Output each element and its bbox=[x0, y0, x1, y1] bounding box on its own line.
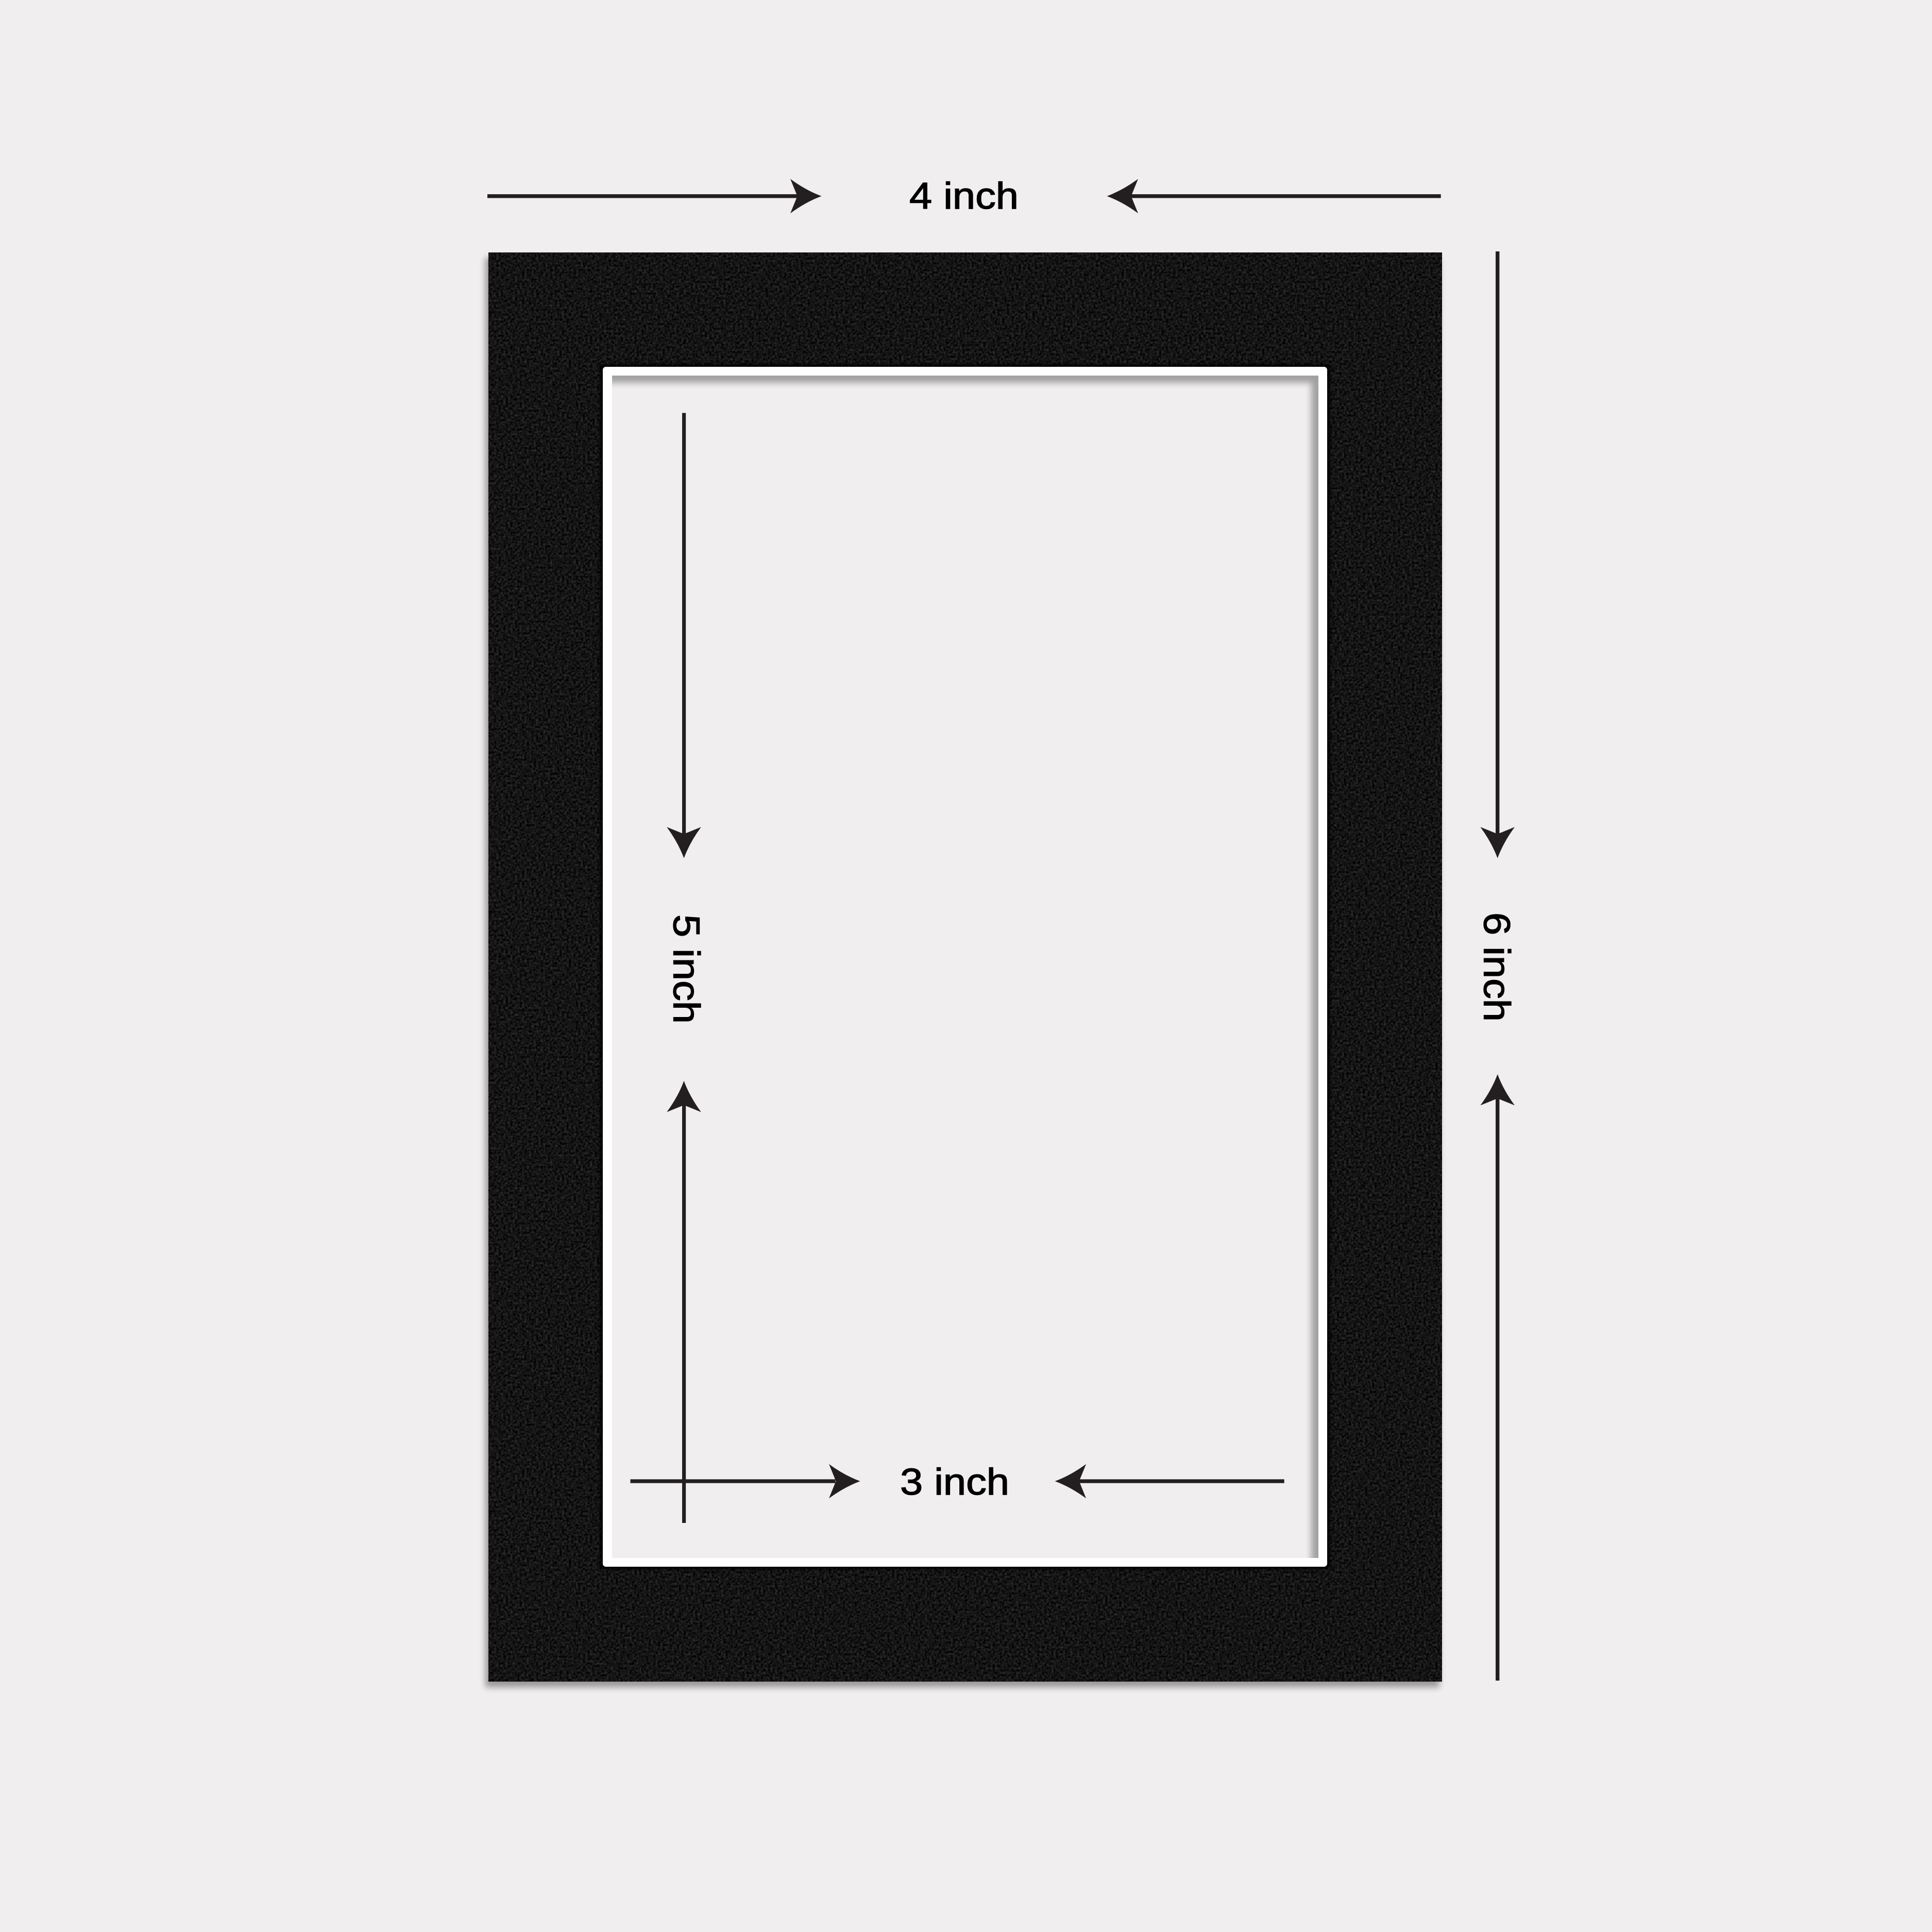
label: 4 inch: 4 inch bbox=[909, 176, 1019, 217]
arrow: left segment pointing right bbox=[487, 179, 822, 213]
window opening bbox=[612, 376, 1318, 1558]
arrow: bottom segment pointing up bbox=[1480, 1074, 1515, 1681]
arrow: right segment pointing left bbox=[1107, 179, 1441, 213]
dimension: outer height 6 inch bbox=[1476, 251, 1517, 1681]
dimension: outer width 4 inch bbox=[487, 176, 1441, 217]
dimension: window width 3 inch bbox=[631, 1462, 1284, 1503]
arrow: top segment pointing down bbox=[667, 413, 701, 858]
window inner shadow bbox=[612, 376, 1318, 1558]
dimension: window height 5 inch bbox=[666, 413, 707, 1523]
mat drop shadow bbox=[485, 258, 1439, 1687]
panel: black photo mat with window bbox=[485, 252, 1442, 1687]
arrow: right segment pointing left bbox=[1055, 1464, 1284, 1498]
label: 3 inch: 3 inch bbox=[900, 1462, 1009, 1503]
mat board bbox=[488, 252, 1442, 1682]
infographic: photo mat dimensions diagram bbox=[481, 179, 1515, 1691]
label: 5 inch: 5 inch bbox=[666, 914, 707, 1024]
arrow: left segment pointing right bbox=[631, 1464, 860, 1498]
arrow: top segment pointing down bbox=[1480, 251, 1515, 858]
label: 6 inch: 6 inch bbox=[1476, 912, 1517, 1022]
window bevel dark edge bbox=[600, 364, 1330, 1569]
white bevel bbox=[603, 367, 1327, 1567]
arrow: bottom segment pointing up bbox=[667, 1081, 701, 1523]
